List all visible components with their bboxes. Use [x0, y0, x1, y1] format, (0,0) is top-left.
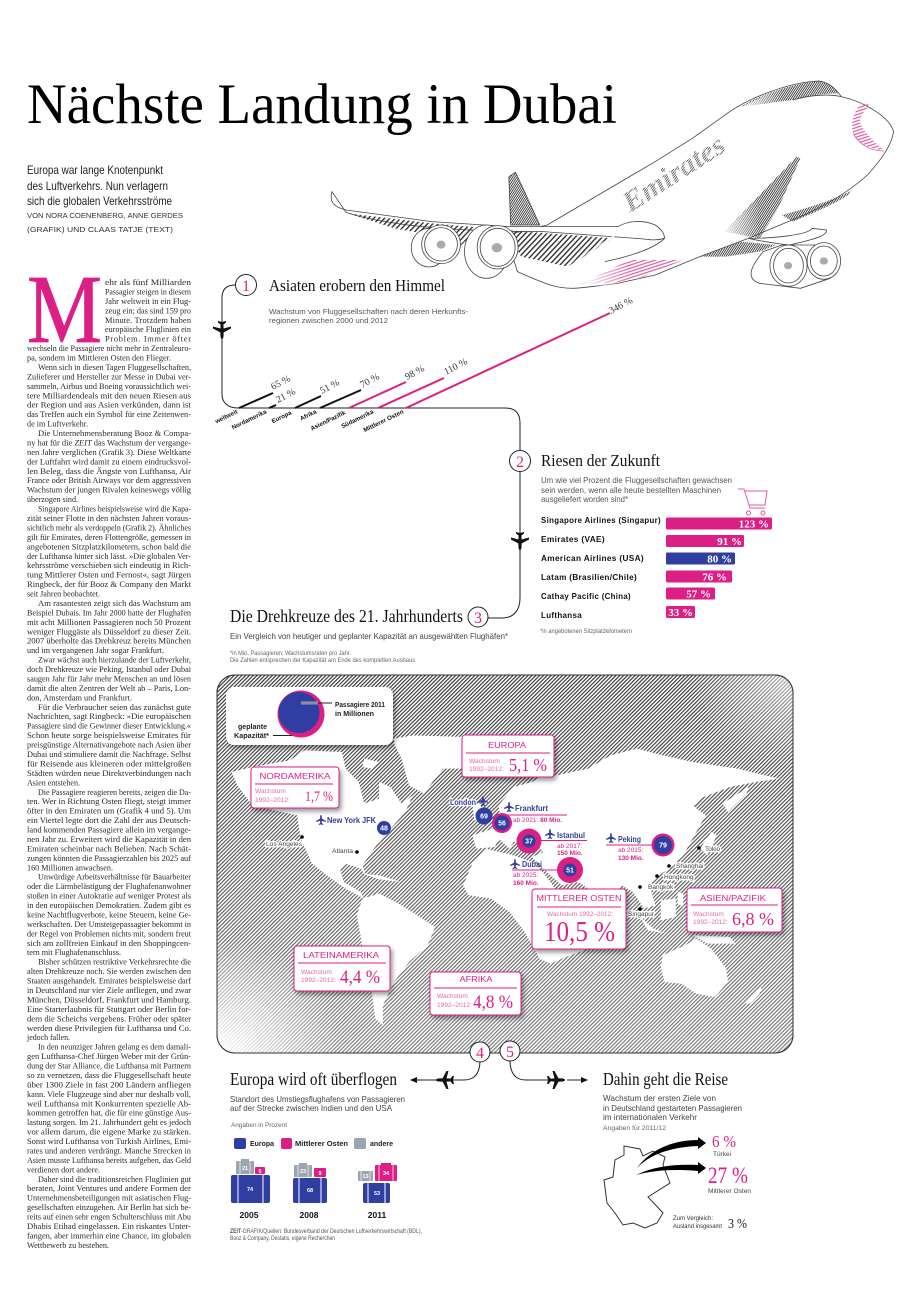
callout: Asien/Pazifik: 1992–2012: [693, 919, 728, 926]
growth values [269, 295, 635, 406]
article body text: don, Amsterdam und Frankfurt. [27, 693, 132, 702]
growth values: 65 % [269, 373, 292, 393]
suitcases 2011: 2011 [368, 1210, 386, 1220]
airport: London [450, 796, 492, 824]
callout: Asien/Pazifik: ASIEN/PAZIFIK [700, 894, 767, 903]
article body text: Asien musste Lufthansa bereits aufgeben, das Geld [27, 1156, 192, 1165]
bar chart: Latam (Brasilien/Chile) [541, 572, 637, 582]
airport: Dubai: 160 Mio. [513, 880, 539, 887]
article body text: Die Unternehmensberatung Booz & Compa- [38, 429, 191, 438]
airports: Asian cities: Shanghai [676, 863, 703, 870]
region labels: weltweit [213, 409, 239, 426]
article body text: der Region und aus Asien verkünden, dann ist [27, 401, 192, 410]
airport: Peking: Peking [618, 835, 641, 844]
article body text: Unternehmensbeteiligungen mit asiatischen Flug- [27, 1194, 191, 1203]
description 1: regionen zwischen 2000 und 2012 [269, 316, 388, 325]
description 4: auf der Strecke zwischen Indien und den USA [230, 1103, 392, 1113]
description 5: Angaben für 2011/12 [603, 1125, 666, 1132]
destination stats: Zum Vergleich: [673, 1215, 713, 1222]
article body text: nen Jahr zu. Erweitert wird die Kapazität in den [27, 835, 192, 844]
callout: Lateinamerika: 4,4 % [340, 967, 380, 988]
airport: Dubai: Dubai [522, 860, 542, 869]
footnote 3: Die Zahlen entsprechen der Kapazität am Ende des kompletten Ausbaus [230, 658, 415, 664]
bar chart: 33 % [668, 607, 693, 619]
article body text: gesellschaften einzugehen. Air Berlin hat sich be- [27, 1203, 191, 1212]
article body text: werkschaften. Der Umsteigepassagier bekommt in [27, 920, 192, 929]
description 2: ausgeliefert worden sind* [541, 494, 629, 504]
article body text: alten Drehkreuze noch. Sie werden zwischen den [27, 967, 192, 976]
badge 5: 5 [506, 1044, 514, 1061]
connector 5 with plane and arrow [510, 1060, 588, 1089]
bar chart: 57 % [686, 588, 711, 600]
article body text: in Deutschland nur vier Ziele anfliegen, und zwar [27, 986, 191, 995]
article body text: so zu vernetzen, dass die Fluggesellschaft heute [27, 1071, 191, 1080]
article body text: Asien entstehen. [27, 778, 80, 787]
suitcases 2005 [231, 1159, 270, 1220]
heading 2: Riesen der Zukunft [541, 451, 660, 470]
article body text: Sonst wird Lufthansa von Turkish Airlines, Emi- [27, 1137, 191, 1146]
intro deck and byline: Europa war lange Knotenpunkt [27, 163, 164, 177]
callout: Asien/Pazifik: Wachstum [693, 911, 724, 918]
article body text: fangen, aber immerhin eine Chance, im globalen [27, 1231, 192, 1240]
description 1: Wachstum von Fluggesellschaften nach deren Herkunfts- [269, 307, 468, 316]
suitcases 2008: 68 [307, 1188, 313, 1194]
article body text: öfter in den Emiraten um (Grafik 4 und 5). Um [27, 807, 192, 816]
destination stats: Ausland insgesamt [673, 1223, 722, 1230]
article body text: kehrsströme verschieben sich eindeutig in Rich- [27, 561, 191, 570]
article body text: Bisher schützen restriktive Verkehrsrechte die [38, 958, 191, 967]
callout: Afrika: Wachstum [437, 993, 468, 1000]
heading 5: Dahin geht die Reise [603, 1069, 728, 1089]
source note [230, 1229, 422, 1242]
article body text: saugen Jahr für Jahr mehr Menschen an und lösen [27, 674, 192, 684]
airport: Peking: 79 [659, 842, 667, 850]
article body text: zeug ein; das sind 159 pro [105, 306, 191, 315]
article body text: der Luftfahrt wird damit zu einem eindrucksvol- [27, 457, 191, 466]
article body text: dung der Star Alliance, die Lufthansa mit Partnern [27, 1062, 192, 1070]
description 5: in Deutschland gestarteten Passagieren [603, 1103, 742, 1113]
description 2: Um wie viel Prozent die Fluggesellschaften gewachsen [541, 475, 732, 485]
bar chart [541, 515, 772, 620]
destination stats: Türkei [713, 1151, 731, 1158]
article body text: Unwürdige Arbeitsverhältnisse für Bauarbeiter [38, 873, 191, 882]
callout: Nordamerika: 1,7 % [305, 789, 333, 805]
article body text: tung Mittlerer Osten und Fernost«, sagt Jürgen [27, 571, 192, 580]
article body text: Passagier steigen in diesem [105, 287, 191, 296]
map legend: Kapazität* [234, 733, 269, 740]
article body text: Für die Verbraucher seien das zunächst gute [38, 703, 191, 712]
bar chart: Cathay Pacific (China) [541, 591, 631, 601]
article body text: keine Nachtflugverbote, keine Steuern, keine Ge- [27, 910, 191, 920]
airport: Peking: 130 Mio. [618, 855, 644, 862]
description 2: sein werden, wenn alle heute bestellten Maschinen [541, 485, 721, 495]
description 4 [230, 1094, 405, 1129]
heading 3: Die Drehkreuze des 21. Jahrhunderts [230, 606, 463, 626]
description 4: Standort des Umstiegsflughafens von Passagieren [230, 1094, 405, 1104]
airport: Peking [606, 833, 674, 862]
callout: Afrika [430, 972, 521, 1015]
article body text: dern die Scheichs vergebens. Früher oder später [27, 1014, 191, 1023]
article body text: pa, sondern im Mittleren Osten den Flieger. [27, 354, 171, 362]
article body text: Zwar wächst auch hierzulande der Luftverkehr, [38, 656, 191, 665]
airport: New York JFK [316, 815, 391, 835]
footnote 3 [230, 651, 415, 664]
airports: Asian cities: Singapur [628, 911, 655, 918]
intro deck and byline: des Luftverkehrs. Nun verlagern [27, 179, 168, 193]
article body text: zität seiner Flotte in den nächsten Jahren voraus- [27, 514, 191, 523]
badge 4: 4 [476, 1045, 484, 1062]
article body text: Ringbeck, der für Booz & Company den Markt [27, 580, 192, 589]
article body text: reits auf einen sehr engen Schulterschluss mit Abu [27, 1213, 192, 1222]
article body text: Am rasantesten zeigt sich das Wachstum am [38, 599, 191, 608]
connector 4 with plane and arrow [410, 1060, 480, 1089]
article body text: europäische Fluglinien ein [105, 325, 192, 334]
article body text: France oder British Airways vor dem aggressiven [27, 476, 192, 485]
source note: ZEIT-GRAFIK/Quellen: Bundesverband der Deutschen Luftverkehrswirtschaft (BDL), [230, 1229, 422, 1235]
panel: chart 2 Riesen der Zukunft [510, 450, 772, 635]
tone fades [217, 675, 793, 1053]
article body text: über 1300 Ziele in fast 200 Ländern anfliegen [27, 1080, 192, 1089]
description 5: Wachstum der ersten Ziele von [603, 1093, 716, 1103]
callout: Afrika: 1992–2012: [437, 1002, 472, 1009]
article body text: mit acht Millionen Passagieren noch 50 Prozent [27, 618, 192, 627]
bar chart: 123 % [739, 518, 769, 530]
article body text: tere Milliardendeals mit den neuen Riesen aus [27, 391, 191, 400]
suitcases 2008: 23 [300, 1169, 306, 1175]
airport: Istanbul: 150 Mio. [557, 850, 583, 857]
description 2 [541, 475, 732, 504]
callout: Lateinamerika [294, 946, 390, 991]
article body text: Dubai und stimuliere damit die Nachfrage. Selbst [27, 750, 192, 759]
article body text: preisgünstige Alternativangebote nach Asien über [27, 741, 191, 750]
suitcases 2011: 13 [362, 1174, 369, 1180]
airport: Frankfurt [492, 802, 567, 833]
panel: chart 5 Dahin geht die Reise [500, 1041, 751, 1232]
map background [217, 675, 793, 1053]
icon: plane on line 2 [511, 532, 529, 550]
suitcases 2005: 74 [247, 1187, 254, 1193]
article body text: stoßen in einer Autokratie auf weniger Protest als [27, 892, 191, 901]
suitcase legend: Europa [250, 1141, 274, 1148]
article body text: Daher sind die traditionsreichen Fluglinien gut [38, 1175, 192, 1184]
airplane illustration [331, 81, 893, 288]
airport: Dubai: 51 [566, 868, 574, 874]
destination stats [673, 1132, 751, 1232]
callout: Lateinamerika: LATEINAMERIKA [303, 951, 380, 960]
article body text: nen Jahre verglichen (Grafik 3). Diese Weltkarte [27, 448, 191, 457]
article body text: Singapore Airlines beispielsweise wird die Kapa- [38, 505, 191, 514]
callout: Nordamerika: Wachstum [255, 788, 286, 795]
airport: Frankfurt: 56 [498, 820, 506, 828]
callout: Asien/Pazifik: 6,8 % [732, 909, 774, 929]
suitcases 2008: 9 [318, 1171, 322, 1177]
footnote 3: *in Mio. Passagieren; Wachstumsraten pro Jahr. [230, 651, 351, 657]
callout: Mittlerer Osten [532, 889, 626, 949]
bar chart: Singapore Airlines (Singapur) [541, 515, 661, 525]
article body text: Wenn sich in diesen Tagen Fluggesellschaften, [38, 363, 191, 372]
article body text [26, 256, 192, 1250]
callout: Nordamerika [251, 767, 339, 808]
callout: Lateinamerika: 1992–2012: [301, 977, 336, 984]
suitcases 2008 [293, 1163, 327, 1220]
article body text: Beispiel Dubais. Im Jahr 2000 hatte der Flughafen [27, 608, 192, 617]
map legend: in Millionen [335, 711, 374, 718]
article body text: jedoch fallen. [26, 1033, 70, 1042]
article body text: len Beleg, dass die Ängste von Lufthansa, Air [27, 467, 191, 476]
article body text: der Regel von Problemen nichts mit, sondern freut [27, 929, 192, 938]
growth values: 110 % [442, 356, 469, 378]
description 5: im internationalen Verkehr [603, 1112, 697, 1122]
article body text: sammeln, Airbus und Boeing voraussichtlich wei- [27, 382, 191, 391]
article body text: 160 Millionen anwachsen. [27, 863, 113, 872]
destination stats: Mittlerer Osten [708, 1188, 751, 1195]
badge 3 [468, 607, 488, 627]
map of Germany [604, 1146, 670, 1228]
article body text: doch Drehkreuze wie Peking, Istanbul oder Dubai [27, 665, 192, 674]
callout: Mittlerer Osten: Wachstum 1992–2012: [547, 911, 613, 918]
article body text: weil Lufthansa mit Konkurrenten spezielle Ab- [27, 1099, 191, 1108]
article body text: ny hat für die ZEIT das Wachstum der vergange- [27, 438, 191, 448]
article body text: Nachrichten, sagt Ringbeck: »Die europäischen [27, 712, 192, 721]
article body text: damit die alten Zentren der Welt ab – Paris, Lon- [27, 684, 191, 693]
article body text: In den neunziger Jahren gelang es dem damali- [38, 1043, 191, 1052]
intro deck and byline: VON NORA COENENBERG, ANNE GERDES [27, 211, 183, 220]
article body text: Staaten ausgehandelt. Emirates beispielsweise darf [27, 977, 191, 986]
growth values: 21 % [274, 386, 297, 406]
region labels: Asien/Pazifik [309, 409, 347, 433]
airport: Atlanta and Los Angeles: Los Angeles [266, 841, 303, 848]
callout: Mittlerer Osten: 10,5 % [544, 917, 615, 948]
footnote 2: *in angebotenen Sitzplatzkilometern [540, 629, 632, 635]
airport: Frankfurt: Frankfurt [515, 804, 548, 813]
airport: Istanbul: ab 2017: [557, 843, 582, 850]
region labels [213, 408, 405, 434]
article body text: gilt für Emirates, deren Flottengröße, gemessen in [27, 533, 192, 542]
bar chart: 91 % [717, 536, 742, 548]
article body text: sichtlich mehr als verdoppeln (Grafik 2). Ähnliches [27, 523, 191, 532]
suitcase legend: Mittlerer Osten [295, 1141, 348, 1148]
suitcase legend [234, 1138, 393, 1149]
callout: Europa [462, 735, 554, 777]
panel: hatched world map [217, 675, 793, 1053]
article body text: seit Jahren beobachtet. [27, 590, 100, 598]
article body text: Emiraten scheinbar nach Belieben. Nach Schät- [27, 844, 191, 853]
destination stats: 3 % [728, 1217, 747, 1232]
article body text: angebotenen Sitzplatzkilometern, schon bald die [27, 542, 191, 551]
intro deck and byline [27, 163, 183, 234]
article body text: Jahr weltweit in ein Flug- [105, 297, 191, 306]
description 5 [603, 1093, 742, 1132]
region labels: Europa [271, 409, 293, 425]
article body text: Passagiere sind die Gewinner dieser Entwicklung.« [27, 722, 191, 731]
intro deck and byline: sich die globalen Verkehrsströme [27, 194, 172, 208]
callout: Europa: EUROPA [488, 741, 527, 750]
article body text: Schon heute sorge beispielsweise Emirates für [27, 731, 191, 740]
destination stats: 6 % [712, 1132, 736, 1151]
airports: Asian cities: Hongkong [664, 874, 694, 881]
article body text: überzogen sind. [27, 495, 78, 504]
callout: Europa: 5,1 % [509, 755, 547, 775]
article body text: Wachstum der jungen Rivalen keineswegs völlig [27, 486, 192, 495]
panel: chart 3 heading block [230, 606, 509, 664]
article body text: beraten, Joint Ventures und andere Formen der [27, 1184, 191, 1193]
airport: Frankfurt: ab 2021: 80 Mio. [513, 817, 562, 824]
airplane line drawing [331, 81, 893, 288]
growth lines [239, 313, 610, 408]
article body text: vor allem darum, die eigene Marke zu stärken. [27, 1128, 191, 1137]
growth values: 346 % [607, 295, 635, 317]
callout: Europa: 1992–2012: [469, 766, 504, 773]
region labels: Nordamerika [231, 408, 268, 431]
airport: Atlanta and Los Angeles: Atlanta [332, 848, 353, 855]
callout: Europa: Wachstum [469, 758, 500, 765]
map legend: Passagiere 2011 [335, 702, 385, 709]
article body text: Dhabis Etihad eingelassen. Ein riskantes Unter- [27, 1222, 191, 1231]
suitcases 2011 [358, 1163, 397, 1220]
article body text: Zulieferer und Hersteller zur Messe in Dubai ver- [27, 372, 191, 381]
suitcases 2005: 2005 [240, 1210, 259, 1220]
description 3: Ein Vergleich von heutiger und geplanter Kapazität an ausgewählten Flughäfen* [230, 631, 509, 641]
icon: shopping cart [738, 489, 767, 515]
article body text: lastung sorgen. Im 21. Jahrhundert geht es jedoch [27, 1118, 192, 1127]
article body text: zungen könnten die Passagierzahlen bis 2025 auf [27, 854, 191, 863]
article body text: sich am zollfreien Einkauf in den Shoppingcen- [27, 939, 191, 948]
badge 2: 2 [516, 454, 524, 471]
airports: Asian cities: Tokio [705, 846, 721, 853]
airports: Asian cities: Bangkok [648, 884, 674, 891]
destination stats: 27 % [708, 1163, 748, 1188]
airport: New York JFK: New York JFK [327, 816, 376, 825]
article body text: Die Passagiere reagieren bereits, zeigen die Da- [38, 788, 191, 797]
map legend [226, 687, 393, 745]
continents [232, 735, 778, 1025]
article body text: tern mit Flughafenanschluss. [27, 948, 121, 957]
region labels: Afrika [299, 408, 318, 422]
article body text: in den europäischen Demokratien. Zudem gibt es [27, 901, 191, 910]
callout: Afrika: AFRIKA [460, 975, 493, 984]
article body text: Minute. Trotzdem haben [105, 316, 192, 325]
badge 5 [500, 1041, 520, 1061]
article body text: kann. Viele Flugzeuge sind aber nur deshalb voll, [27, 1090, 191, 1099]
drop cap: M [27, 256, 102, 363]
airport: Istanbul: Istanbul [557, 831, 585, 840]
airport: Dubai: ab 2025: [513, 872, 538, 879]
airport: Istanbul [516, 828, 587, 857]
article body text: oder die Lärmbelästigung der Flughafenanwohner [27, 882, 191, 891]
badge 4 [470, 1042, 490, 1062]
airport: Dubai [510, 857, 583, 887]
article body text: und im vergangenen Jahr sogar Frankfurt. [27, 646, 164, 655]
intro deck and byline: (GRAFIK) UND CLAAS TATJE (TEXT) [27, 225, 174, 234]
badge 3: 3 [474, 610, 482, 627]
article body text: Eine Starterlaubnis für Stuttgart oder Berlin for- [27, 1005, 191, 1014]
flow arrows [636, 1137, 706, 1175]
article body text: land kommenden Passagiere allein im vergange- [27, 826, 191, 834]
bar chart: Emirates (VAE) [541, 534, 605, 544]
heading 1: Asiaten erobern den Himmel [269, 276, 445, 295]
source note: Booz & Company, Destatis, eigene Recherchen [230, 1236, 335, 1242]
Emirates lettering: Emirates [615, 129, 731, 219]
article body text: 2007 überholte das Drehkreuz bereits München [27, 637, 192, 646]
article body text: der Lufthansa hinter sich lässt. »Die globalen Ver- [27, 552, 191, 561]
growth values: 51 % [318, 377, 341, 397]
badge 2 [510, 450, 530, 472]
bar chart: 76 % [702, 572, 727, 584]
article body text: wechseln die Passagiere nicht mehr in Zentraleuro- [27, 344, 191, 353]
bar chart: Lufthansa [541, 610, 582, 620]
connector line linking charts 1, 2 and 3 [222, 285, 520, 618]
airport: Atlanta and Los Angeles [266, 835, 359, 855]
suitcases 2011: 53 [374, 1191, 380, 1197]
article body text: das Treffen auch ein Symbol für eine Zeitenwen- [27, 410, 191, 419]
map legend: geplante [238, 724, 267, 731]
bar chart: American Airlines (USA) [541, 553, 644, 563]
article body text: de im Luftverkehr. [27, 420, 88, 429]
description 1 [269, 307, 468, 325]
panel: chart 1 Asiaten erobern den Himmel [213, 274, 635, 434]
badge 1: 1 [242, 278, 250, 295]
growth values: 98 % [403, 363, 426, 383]
article body text: gen Lufthansa-Chef Jürgen Weber mit der Grün- [27, 1052, 191, 1061]
suitcases 2005: 5 [258, 1169, 262, 1175]
airport: New York JFK: 48 [380, 826, 388, 832]
callout: Lateinamerika: Wachstum [301, 969, 332, 976]
callout: Mittlerer Osten: MITTLERER OSTEN [536, 894, 622, 903]
suitcases 2011: 34 [383, 1171, 390, 1177]
callout: Afrika: 4,8 % [473, 992, 513, 1013]
suitcases 2008: 2008 [300, 1210, 319, 1220]
article body text: rates und anderen verdrängt. Manche Strecken in [27, 1146, 192, 1156]
article body text: für Reisende aus kleineren oder mittelgroßen [27, 759, 192, 768]
icon: plane on line [213, 321, 231, 339]
article body text: München, Düsseldorf, Frankfurt und Hamburg. [27, 995, 191, 1004]
airport: Peking: ab 2015: [618, 847, 643, 854]
article body text: ten. Wer in Richtung Osten fliegt, steigt immer [27, 797, 191, 806]
article body text: weniger Fluggäste als Düsseldorf zu dieser Zeit. [27, 627, 191, 636]
article body text: werden diese Privilegien für Lufthansa und Co. [27, 1024, 191, 1033]
airport: Istanbul: 37 [525, 838, 533, 846]
panel: chart 4 Europa wird oft überflogen [230, 1042, 490, 1242]
heading 4: Europa wird oft überflogen [230, 1069, 397, 1089]
region labels: Südamerika [340, 408, 375, 430]
description 4: Angaben in Prozent [231, 1122, 287, 1129]
airport: London: 69 [480, 814, 488, 820]
callout: Nordamerika: NORDAMERIKA [260, 772, 331, 781]
badge 1 [236, 274, 256, 296]
article body text: ein Viertel legte dort die Zahl der aus Deutsch- [27, 816, 191, 825]
region labels: Mittlerer Osten [363, 408, 405, 434]
article body text: Problem. Immer öfter [105, 335, 191, 344]
bar chart: 80 % [707, 554, 732, 566]
airport: London: London [450, 798, 476, 807]
airports: Asian cities [628, 846, 721, 918]
callout: Asien/Pazifik [687, 888, 782, 932]
article body text: verdienen dort andere. [27, 1165, 100, 1174]
article body text: Wettbewerb zu bestehen. [27, 1241, 109, 1250]
callout: Nordamerika: 1992–2012: [255, 797, 290, 804]
title: Nächste Landung in Dubai [27, 73, 617, 136]
article body text: kommen getroffen hat, die für eine günstige Aus- [27, 1109, 191, 1118]
growth values: 70 % [358, 371, 381, 391]
article body text: ehr als fünf Milliarden [105, 278, 192, 287]
suitcases 2005: 21 [242, 1166, 248, 1172]
article body text: Städten würden neue Direktverbindungen nach [27, 769, 192, 778]
suitcase legend: andere [370, 1141, 393, 1148]
